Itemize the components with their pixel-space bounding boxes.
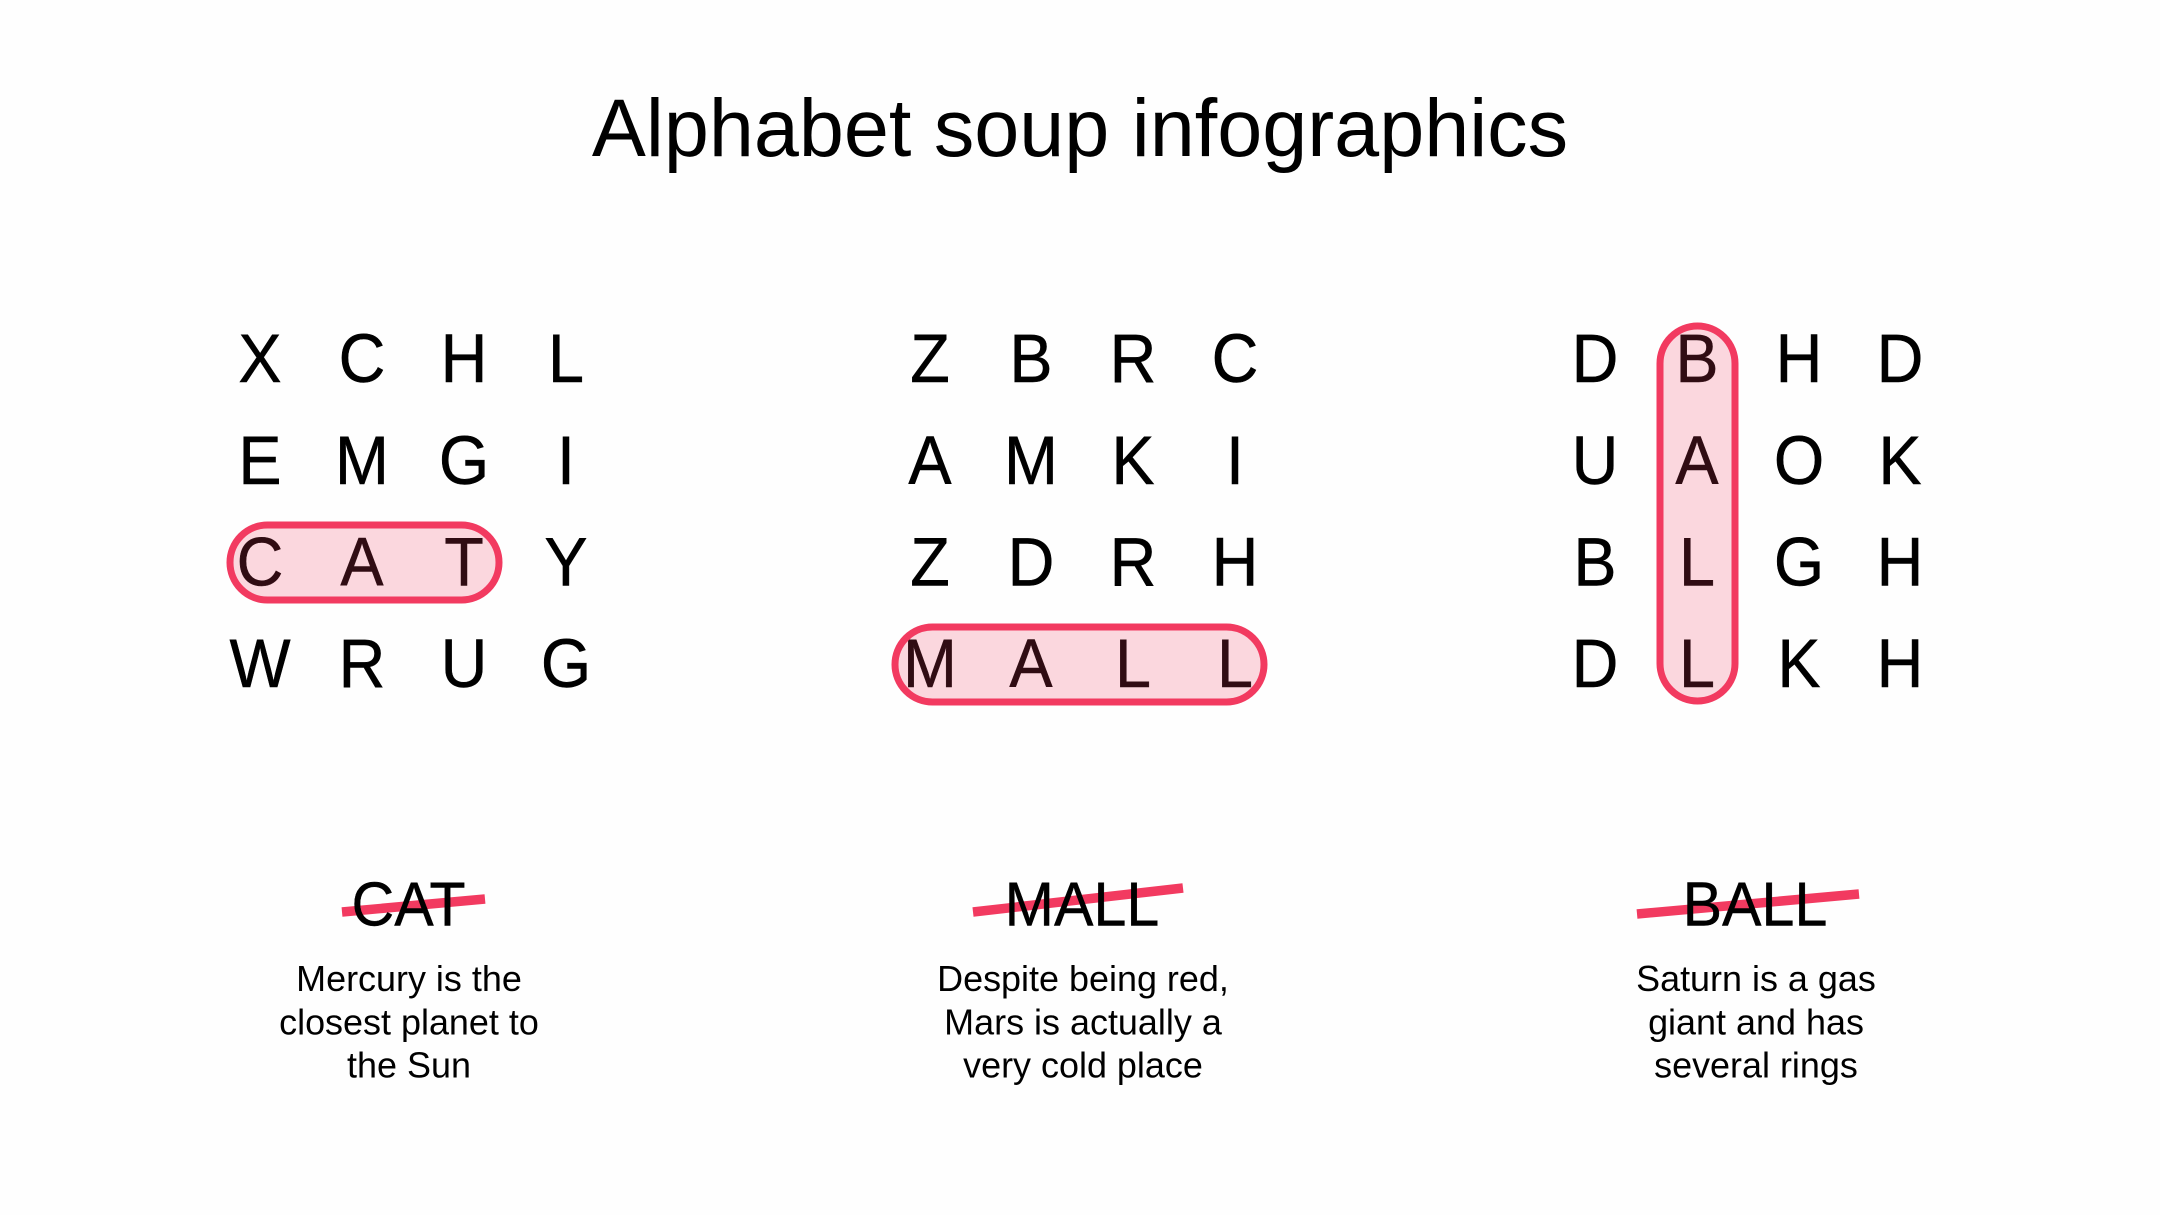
- letter grid: CAT: L: [548, 321, 584, 397]
- letter grid: CAT: Y: [544, 525, 588, 601]
- letter grid: BALL: D: [1572, 626, 1618, 702]
- highlight: MALL: [895, 627, 1264, 702]
- letter grid: MALL: C: [1212, 321, 1258, 397]
- letter grid: BALL: K: [1777, 626, 1821, 702]
- letter grid: CAT: T: [444, 525, 484, 601]
- letter grid: CAT: A: [340, 525, 384, 601]
- word: MALL crossed out: MALL: [1005, 869, 1159, 939]
- letter grid: BALL: A: [1675, 423, 1719, 499]
- letter grid: BALL: L: [1679, 525, 1715, 601]
- letter grid: MALL: L: [1115, 626, 1151, 702]
- letter grid: MALL: A: [1009, 626, 1053, 702]
- letter grid: BALL: G: [1774, 525, 1824, 601]
- letter grid: MALL: H: [1212, 525, 1258, 601]
- letter grid: BALL: [1572, 321, 1923, 702]
- letter grid: MALL: [903, 321, 1258, 702]
- letter grid: CAT: C: [237, 525, 283, 601]
- description: Mars: [937, 958, 1229, 1086]
- letter grid: MALL: K: [1111, 423, 1155, 499]
- letter grid: MALL: L: [1217, 626, 1253, 702]
- letter grid: MALL: M: [903, 626, 957, 702]
- letter grid: BALL: L: [1679, 626, 1715, 702]
- letter grid: MALL: D: [1008, 525, 1054, 601]
- letter grid: CAT: X: [238, 321, 282, 397]
- letter grid: MALL: A: [908, 423, 952, 499]
- letter grid: CAT: I: [557, 423, 575, 499]
- letter grid: BALL: D: [1877, 321, 1923, 397]
- description: Mars: Despite being red,: [937, 958, 1229, 999]
- description: Mars: very cold place: [963, 1044, 1203, 1086]
- description: Mercury: closest planet to: [279, 1001, 539, 1043]
- highlight: BALL: [1660, 326, 1735, 701]
- letter grid: CAT: U: [441, 626, 487, 702]
- letter grid: CAT: G: [541, 626, 591, 702]
- letter grid: CAT: C: [339, 321, 385, 397]
- letter grid: CAT: H: [441, 321, 487, 397]
- letter grid: MALL: I: [1226, 423, 1244, 499]
- letter grid: BALL: B: [1675, 321, 1719, 397]
- description: Saturn: giant and has: [1648, 1001, 1864, 1043]
- letter grid: CAT: G: [439, 423, 489, 499]
- letter grid: BALL: K: [1878, 423, 1922, 499]
- letter grid: BALL: H: [1877, 626, 1923, 702]
- letter grid: BALL: D: [1572, 321, 1618, 397]
- letter grid: CAT: [229, 321, 591, 702]
- word: BALL crossed out: [1637, 869, 1859, 939]
- panel: MALL word grid: [895, 321, 1264, 702]
- letter grid: MALL: R: [1110, 525, 1156, 601]
- letter grid: BALL: B: [1573, 525, 1617, 601]
- letter grid: MALL: B: [1009, 321, 1053, 397]
- letter grid: CAT: E: [238, 423, 282, 499]
- letter grid: MALL: Z: [910, 321, 950, 397]
- letter grid: BALL: O: [1774, 423, 1824, 499]
- description: Mercury: Mercury is the: [296, 958, 522, 999]
- letter grid: CAT: R: [339, 626, 385, 702]
- description: Saturn: several rings: [1654, 1044, 1858, 1086]
- letter grid: BALL: H: [1776, 321, 1822, 397]
- title: Alphabet soup infographics: [592, 83, 1568, 174]
- description: Saturn: Saturn is a gas: [1636, 958, 1876, 999]
- letter grid: MALL: M: [1004, 423, 1058, 499]
- word: CAT crossed out: CAT: [351, 869, 466, 939]
- letter grid: CAT: M: [335, 423, 389, 499]
- letter grid: BALL: U: [1572, 423, 1618, 499]
- description: Mars: Mars is actually a: [944, 1001, 1223, 1043]
- panel: BALL word grid: [1572, 321, 1923, 702]
- description: Saturn: [1636, 958, 1876, 1086]
- description: Mercury: the Sun: [347, 1044, 471, 1086]
- letter grid: BALL: H: [1877, 525, 1923, 601]
- highlight: CAT: [230, 525, 499, 600]
- description: Mercury: [279, 958, 539, 1086]
- letter grid: MALL: Z: [910, 525, 950, 601]
- letter grid: CAT: W: [229, 626, 291, 702]
- word: BALL crossed out: BALL: [1683, 869, 1827, 939]
- letter grid: MALL: R: [1110, 321, 1156, 397]
- panel: CAT word grid: [229, 321, 591, 702]
